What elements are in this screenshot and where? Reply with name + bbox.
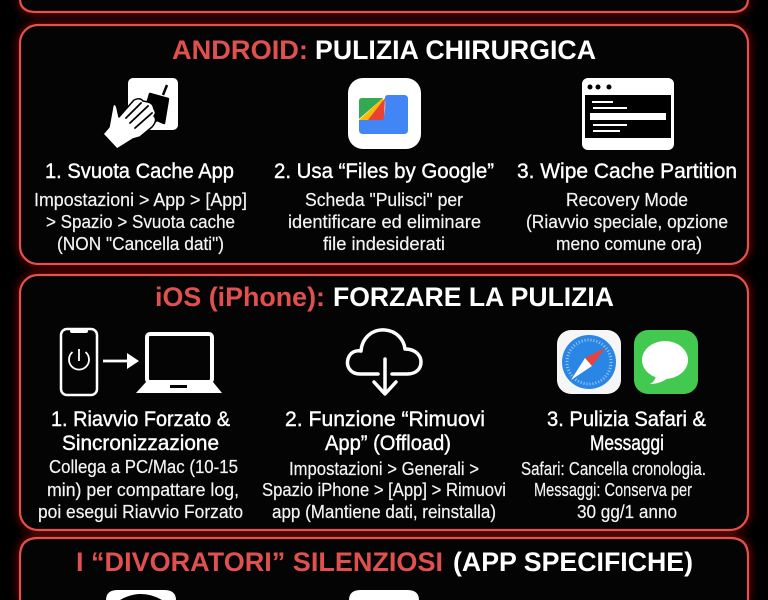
heading: silent devourers	[76, 547, 693, 577]
step 3: Wipe Cache Partition: Recovery Mode	[566, 189, 688, 210]
step 1: Riavvio Forzato: min) per compattare log,	[47, 479, 239, 500]
step 2: Files by Google	[274, 159, 494, 254]
step 1: Svuota Cache App	[34, 159, 247, 254]
icon: terminal window	[582, 78, 674, 150]
icon: phone to laptop	[61, 329, 222, 395]
icon: Messages	[634, 330, 698, 394]
step 2: Files by Google: identificare ed eliminare	[288, 211, 481, 232]
step 3: Pulizia Safari: Messaggi	[590, 431, 664, 455]
step 1: Svuota Cache App: (NON "Cancella dati")	[57, 233, 224, 254]
step 1: Svuota Cache App: 1. Svuota Cache App	[45, 159, 234, 183]
panel: previous section (cropped)	[20, 0, 748, 12]
step 2: Rimuovi App: Spazio iPhone > [App] > Rimuovi	[262, 479, 506, 500]
heading: iOS: iOS (iPhone):	[155, 282, 325, 312]
icon: hand wiping with brush	[103, 78, 178, 149]
step 1: Riavvio Forzato: poi esegui Riavvio Forzato	[38, 501, 243, 522]
icon: cloud download	[348, 330, 421, 394]
heading: Android: ANDROID:	[172, 35, 308, 65]
icon: Safari	[557, 330, 621, 394]
panel: iOS	[20, 275, 748, 530]
step 3: Pulizia Safari	[521, 407, 706, 522]
step 3: Wipe Cache Partition	[517, 159, 737, 254]
step 3: Pulizia Safari: 30 gg/1 anno	[577, 501, 677, 522]
step 2: Rimuovi App: 2. Funzione “Rimuovi	[285, 407, 485, 431]
icon: app tile left (cropped)	[106, 590, 176, 600]
step 1: Riavvio Forzato	[38, 407, 243, 522]
icon: app tile centre (cropped)	[349, 590, 419, 600]
step 2: Rimuovi App	[262, 407, 506, 522]
step 3: Pulizia Safari: Messaggi: Conserva per	[534, 479, 692, 500]
step 3: Wipe Cache Partition: meno comune ora)	[556, 233, 702, 254]
heading: Android	[172, 35, 596, 65]
heading: iOS: FORZARE LA PULIZIA	[333, 282, 614, 312]
heading: silent devourers: I “DIVORATORI” SILENZIOSI	[76, 547, 443, 577]
step 1: Riavvio Forzato: 1. Riavvio Forzato &	[51, 407, 230, 431]
step 2: Files by Google: Scheda "Pulisci" per	[305, 189, 463, 210]
step 2: Files by Google: file indesiderati	[323, 233, 445, 254]
step 1: Svuota Cache App: > Spazio > Svuota cache	[46, 211, 235, 232]
step 3: Wipe Cache Partition: (Riavvio speciale, opzione	[526, 211, 728, 232]
heading: Android: PULIZIA CHIRURGICA	[315, 35, 596, 65]
heading: silent devourers: (APP SPECIFICHE)	[453, 547, 693, 577]
step 2: Rimuovi App: app (Mantiene dati, reinstalla)	[272, 501, 496, 522]
step 3: Wipe Cache Partition: 3. Wipe Cache Partition	[517, 159, 737, 183]
step 2: Files by Google: 2. Usa “Files by Google”	[274, 159, 494, 183]
step 3: Pulizia Safari: 3. Pulizia Safari &	[547, 407, 706, 431]
step 1: Svuota Cache App: Impostazioni > App > [App]	[34, 189, 247, 210]
step 3: Pulizia Safari: Safari: Cancella cronologia.	[521, 458, 706, 479]
step 2: Rimuovi App: App” (Offload)	[325, 431, 451, 455]
icon: Files by Google	[348, 78, 421, 149]
step 2: Rimuovi App: Impostazioni > Generali >	[289, 458, 479, 479]
panel: Android	[20, 25, 748, 264]
panel: silent devourers	[20, 538, 748, 600]
step 1: Riavvio Forzato: Collega a PC/Mac (10-15	[49, 456, 238, 477]
heading: iOS	[155, 282, 614, 312]
step 1: Riavvio Forzato: Sincronizzazione	[62, 431, 219, 455]
